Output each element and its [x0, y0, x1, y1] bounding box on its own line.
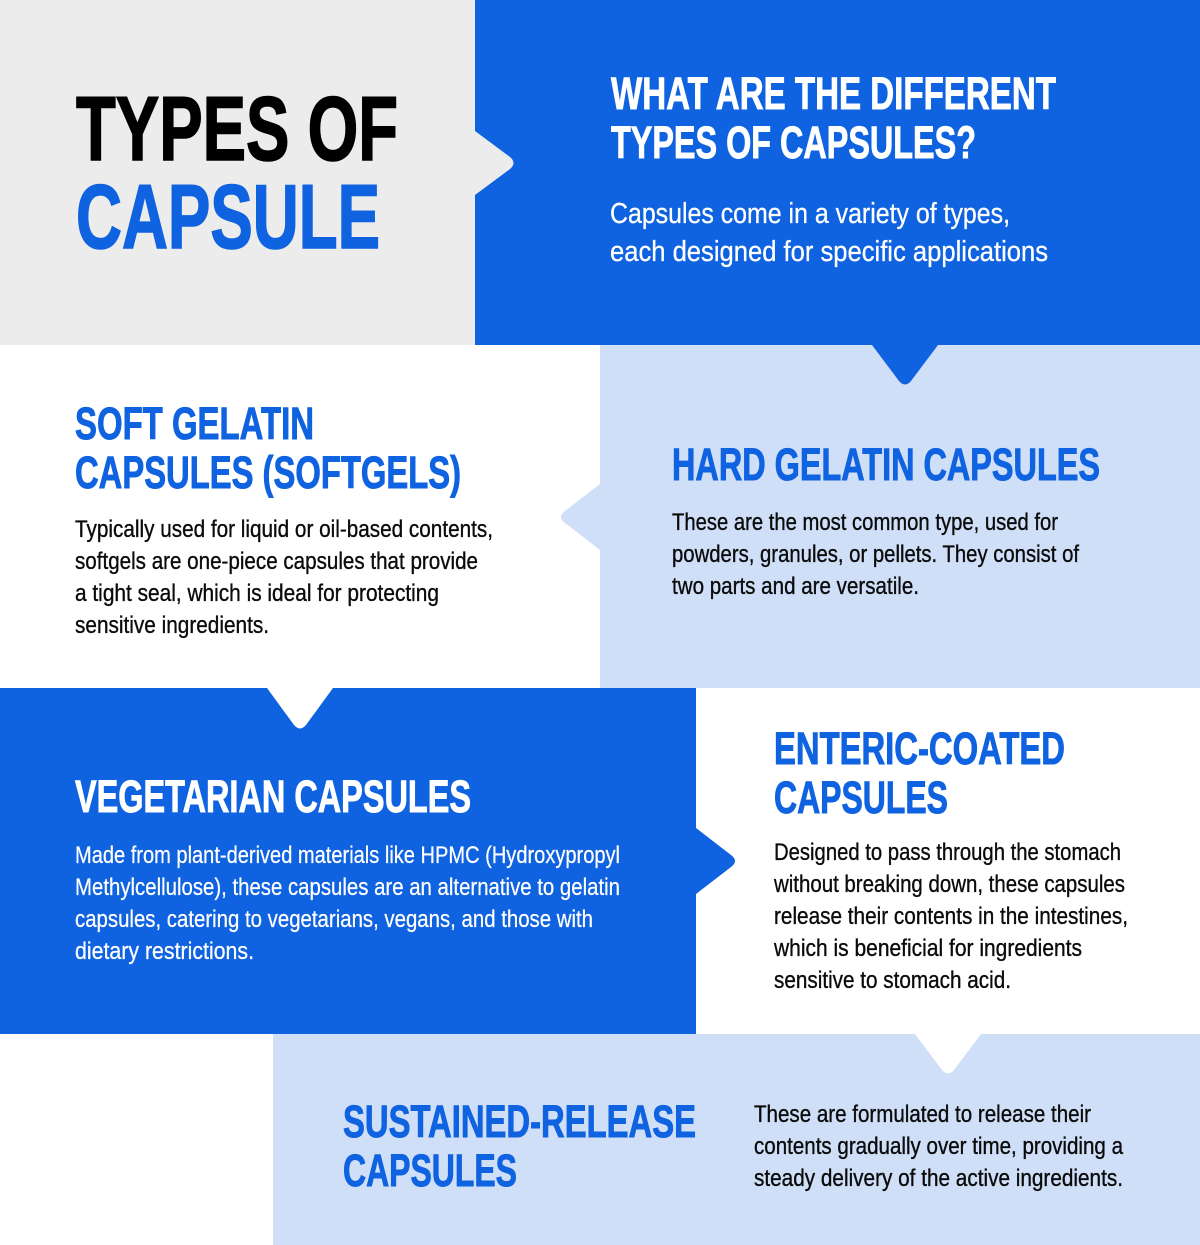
panel: soft gelatin capsules	[75, 398, 493, 639]
vegetarian text	[75, 842, 620, 965]
soft gelatin text: Typically used for liquid or oil-based contents,	[75, 516, 493, 543]
arrow: enteric-coated pointer	[915, 1034, 981, 1074]
arrow: hard gelatin pointer	[561, 484, 600, 550]
hard gelatin text: powders, granules, or pellets. They consist of	[672, 541, 1079, 568]
vegetarian text: dietary restrictions.	[75, 938, 254, 965]
hard gelatin text: These are the most common type, used for	[672, 509, 1058, 536]
soft gelatin text: a tight seal, which is ideal for protecting	[75, 580, 439, 607]
vegetarian text: capsules, catering to vegetarians, vegans, and those with	[75, 906, 593, 933]
intro text: Capsules come in a variety of types,	[610, 198, 1010, 230]
hard gelatin text	[672, 509, 1079, 600]
enteric-coated text: sensitive to stomach acid.	[774, 967, 1011, 994]
panel: hard gelatin capsules	[561, 345, 1200, 688]
enteric-coated heading: CAPSULES	[774, 772, 948, 823]
soft gelatin heading	[75, 398, 461, 498]
enteric-coated heading	[774, 723, 1065, 823]
hard gelatin text: two parts and are versatile.	[672, 573, 919, 600]
enteric-coated text: Designed to pass through the stomach	[774, 839, 1121, 866]
sustained-release text	[754, 1101, 1124, 1192]
sustained-release heading: CAPSULES	[343, 1145, 517, 1196]
enteric-coated text: release their contents in the intestines,	[774, 903, 1128, 930]
title heading: TYPES OF	[76, 79, 398, 180]
title heading: CAPSULE	[76, 167, 380, 268]
soft gelatin heading: CAPSULES (SOFTGELS)	[75, 447, 461, 498]
vegetarian heading: VEGETARIAN CAPSULES	[75, 771, 471, 822]
soft gelatin heading: SOFT GELATIN	[75, 398, 314, 449]
vegetarian text: Made from plant-derived materials like HPMC (Hydroxypropyl	[75, 842, 620, 869]
panel: enteric-coated capsules	[773, 723, 1128, 994]
panel: title	[0, 0, 475, 345]
sustained-release text: contents gradually over time, providing a	[754, 1133, 1124, 1160]
soft gelatin text	[75, 516, 493, 639]
intro heading	[611, 68, 1056, 168]
enteric-coated heading: ENTERIC-COATED	[774, 723, 1065, 774]
intro text	[610, 198, 1048, 268]
intro heading: TYPES OF CAPSULES?	[611, 117, 976, 168]
arrow: vegetarian pointer	[696, 828, 735, 894]
sustained-release text: These are formulated to release their	[754, 1101, 1091, 1128]
sustained-release heading	[343, 1096, 696, 1196]
panel: vegetarian capsules	[0, 688, 735, 1034]
vegetarian text: Methylcellulose), these capsules are an alternative to gelatin	[75, 874, 620, 901]
arrow: soft gelatin pointer	[267, 688, 333, 728]
intro heading: WHAT ARE THE DIFFERENT	[611, 68, 1056, 119]
panel: intro	[475, 0, 1200, 345]
enteric-coated text: without breaking down, these capsules	[773, 871, 1125, 898]
arrow: intro pointer	[872, 345, 938, 384]
enteric-coated text	[773, 839, 1128, 994]
enteric-coated text: which is beneficial for ingredients	[773, 935, 1082, 962]
title heading	[76, 79, 398, 268]
intro text: each designed for specific applications	[610, 236, 1048, 268]
panel: sustained-release capsules	[273, 1034, 1200, 1245]
soft gelatin text: softgels are one-piece capsules that provide	[75, 548, 478, 575]
soft gelatin text: sensitive ingredients.	[75, 612, 269, 639]
sustained-release text: steady delivery of the active ingredients.	[754, 1165, 1123, 1192]
sustained-release heading: SUSTAINED-RELEASE	[343, 1096, 696, 1147]
arrow: title pointer	[475, 131, 514, 195]
